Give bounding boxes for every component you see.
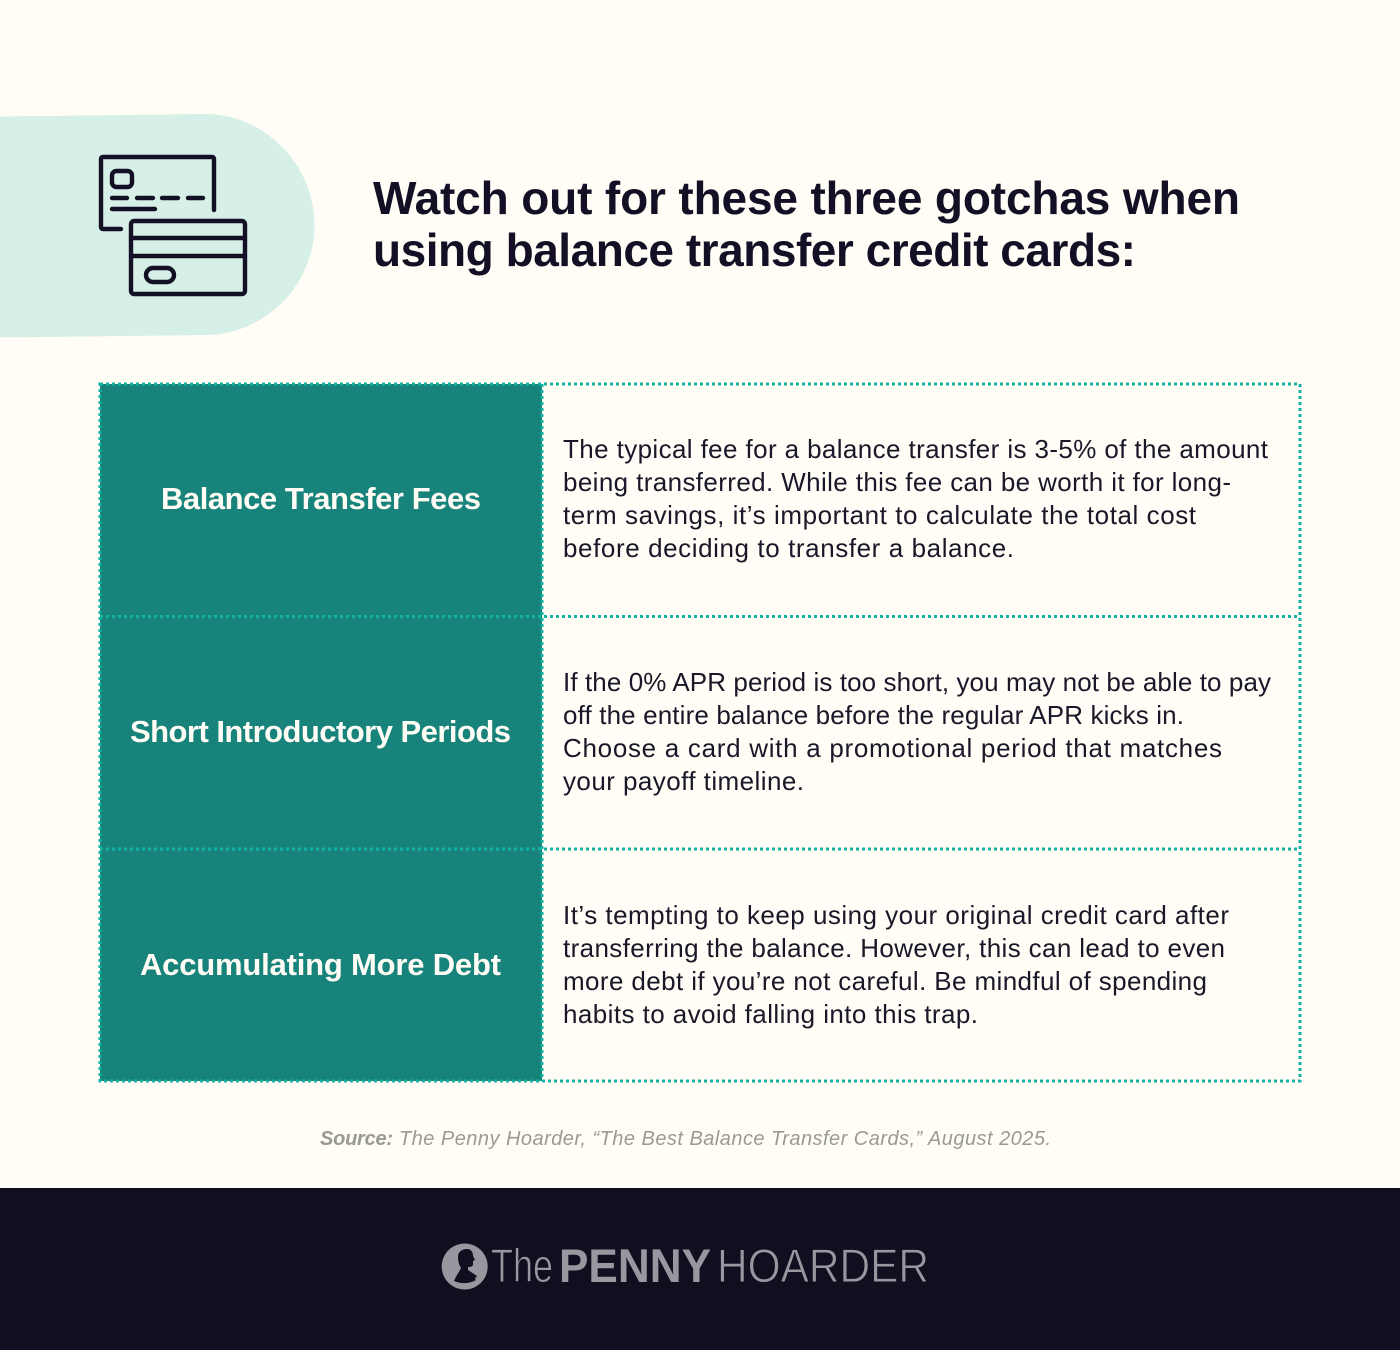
row 3: accumulating more debt: It’s tempting to keep using your original credit card after bbox=[563, 900, 1229, 930]
row 1: balance transfer fees: term savings, it’s important to calculate the total cost bbox=[563, 500, 1197, 530]
row 2: short introductory periods: Choose a card with a promotional period that matches bbox=[563, 733, 1222, 763]
title: Watch out for these three gotchas when bbox=[373, 172, 1240, 224]
source note: The Penny Hoarder, “The Best Balance Transfer Cards,” August 2025. bbox=[399, 1128, 1051, 1150]
table panel bbox=[100, 384, 1300, 1081]
icon: penny portrait bbox=[442, 1244, 488, 1290]
row 1: balance transfer fees: before deciding to transfer a balance. bbox=[563, 533, 1014, 563]
logo: The Penny Hoarder bbox=[442, 1239, 929, 1292]
row 2: short introductory periods: If the 0% APR period is too short, you may not be able to pay bbox=[563, 667, 1271, 697]
badge background bbox=[0, 114, 314, 338]
row 1: balance transfer fees: being transferred. While this fee can be worth it for long- bbox=[563, 467, 1231, 497]
table dotted grid bbox=[100, 384, 1300, 1081]
row 3: accumulating more debt: Accumulating More Debt bbox=[140, 947, 501, 982]
row 2: short introductory periods bbox=[130, 667, 1271, 796]
row 3: accumulating more debt: more debt if you’re not careful. Be mindful of spending bbox=[563, 966, 1207, 996]
row 2: short introductory periods: your payoff timeline. bbox=[563, 766, 804, 796]
row 1: balance transfer fees: Balance Transfer Fees bbox=[161, 481, 481, 516]
title bbox=[373, 172, 1240, 276]
row 3: accumulating more debt bbox=[140, 900, 1229, 1029]
logo wordmark: PENNY bbox=[559, 1239, 711, 1292]
footer band bbox=[0, 1188, 1400, 1350]
logo wordmark: HOARDER bbox=[717, 1239, 929, 1292]
row 3: accumulating more debt: transferring the balance. However, this can lead to even bbox=[563, 933, 1225, 963]
source note: Source: bbox=[320, 1128, 393, 1150]
row 1: balance transfer fees: The typical fee for a balance transfer is 3-5% of the amount bbox=[563, 434, 1269, 464]
row 3: accumulating more debt: habits to avoid falling into this trap. bbox=[563, 999, 978, 1029]
row 1: balance transfer fees bbox=[161, 434, 1269, 563]
label column background bbox=[100, 384, 542, 1081]
header icon badge bbox=[0, 114, 314, 338]
row 2: short introductory periods: Short Introductory Periods bbox=[130, 714, 511, 749]
icon: credit cards bbox=[101, 157, 245, 294]
logo wordmark: The bbox=[491, 1239, 553, 1292]
logo wordmark bbox=[491, 1239, 929, 1292]
title: using balance transfer credit cards: bbox=[373, 224, 1136, 276]
row 2: short introductory periods: off the entire balance before the regular APR kicks in. bbox=[563, 700, 1184, 730]
